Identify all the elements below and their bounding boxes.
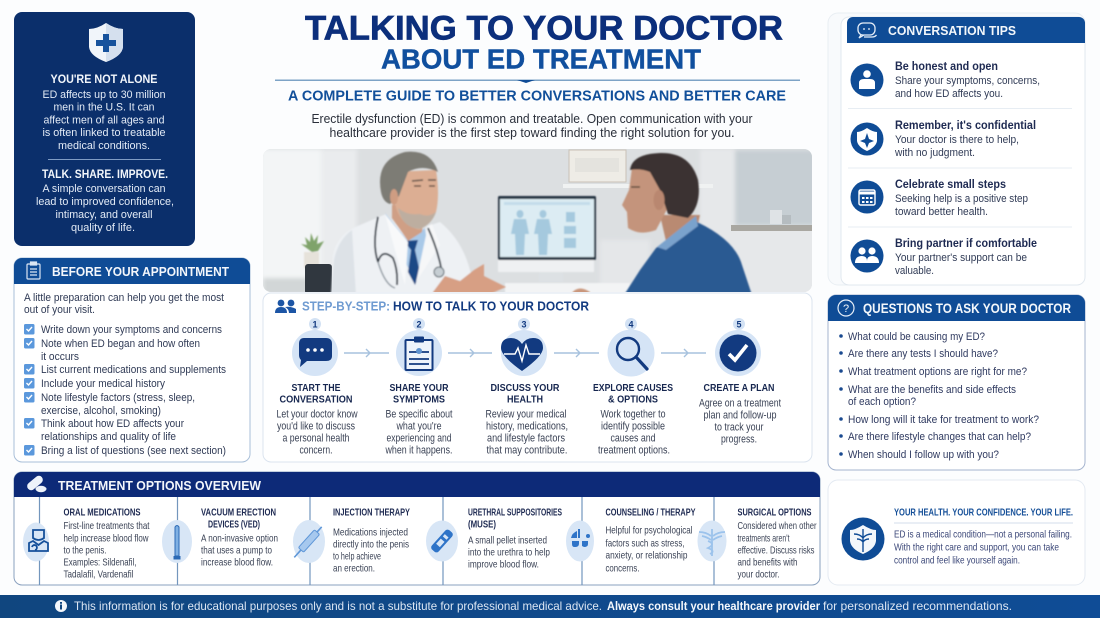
tip: bring partner: valuable. <box>895 265 934 277</box>
panel: questions to ask your doctor <box>828 295 1085 470</box>
step 2: share your symptoms <box>385 318 452 456</box>
heading: step-by-step <box>302 300 589 314</box>
heading: before your appointment: BEFORE YOUR APPOINTMENT <box>52 265 229 279</box>
plant <box>301 233 324 268</box>
heading: talk share improve: TALK. SHARE. IMPROVE. <box>42 169 168 181</box>
column: oral medications: help increase blood flow <box>64 534 149 544</box>
text: ED prevalence: is often linked to treatable <box>42 127 166 139</box>
title: ABOUT ED TREATMENT <box>381 44 701 74</box>
step 2: share your symptoms: when it happens. <box>385 444 452 456</box>
column: urethral suppositories: into the urethra to help <box>468 548 550 558</box>
text: medical condition <box>894 530 1072 566</box>
column: urethral suppositories: (MUSE) <box>468 520 496 530</box>
column: surgical options <box>698 508 817 580</box>
intro text: healthcare provider is the first step toward finding the right solution for you. <box>330 125 734 140</box>
step 4: explore causes: causes and <box>610 432 656 444</box>
step 5: create a plan: plan and follow-up <box>704 410 776 422</box>
step 2: share your symptoms: SYMPTOMS <box>393 394 445 406</box>
panel: your health callout <box>828 480 1085 585</box>
tip: be honest <box>850 61 1040 100</box>
column: oral medications <box>23 508 150 580</box>
tip: celebrate small steps <box>850 179 1028 218</box>
question list: What are the benefits and side effects <box>848 384 1016 396</box>
step 5: create a plan: 5 <box>736 320 742 330</box>
checklist: Think about how ED affects your <box>41 418 184 430</box>
step 5: create a plan: Agree on a treatment <box>699 398 781 410</box>
tip: celebrate small steps: Celebrate small steps <box>895 179 1006 191</box>
tip: be honest: Be honest and open <box>895 61 998 73</box>
step 4: explore causes <box>593 318 673 456</box>
panel: step-by-step <box>263 293 812 462</box>
column: injection therapy: Medications injected <box>333 528 408 538</box>
column: oral medications: Examples: Sildenafil, <box>64 558 136 568</box>
step 4: explore causes: Work together to <box>600 408 666 420</box>
checklist: Bring a list of questions (see next section) <box>41 445 226 457</box>
checklist: Note when ED began and how often <box>41 338 200 350</box>
text: simple conversation: quality of life. <box>71 222 135 234</box>
column: counseling therapy: COUNSELING / THERAPY <box>606 508 696 518</box>
text: ED prevalence <box>42 89 166 152</box>
question list: Are there lifestyle changes that can help? <box>848 431 1031 443</box>
question list: How long will it take for treatment to work? <box>848 414 1039 426</box>
text: intro <box>24 292 224 316</box>
tip: celebrate small steps: Seeking help is a positive step <box>895 193 1028 205</box>
column: oral medications: First-line treatments that <box>64 521 150 532</box>
step 1: start the conversation: concern. <box>300 444 332 456</box>
column: vacuum erection devices: VACUUM ERECTION <box>201 508 276 518</box>
column: counseling therapy: concerns. <box>606 564 640 574</box>
icon: people <box>275 300 296 313</box>
step 1: start the conversation <box>276 318 358 456</box>
tip: bring partner: Your partner's support can be <box>895 252 1027 264</box>
column: oral medications: ORAL MEDICATIONS <box>64 508 141 518</box>
tip: confidential: Remember, it's confidential <box>895 120 1036 132</box>
checklist <box>24 324 226 457</box>
icon: info <box>55 600 67 612</box>
text: intro: A little preparation can help you get the most <box>24 292 224 304</box>
step 5: create a plan <box>699 318 781 446</box>
heading: step-by-step: HOW TO TALK TO YOUR DOCTOR <box>393 300 589 314</box>
tip: confidential <box>850 120 1036 159</box>
column: surgical options: and benefits with <box>738 558 798 568</box>
footer: disclaimer: Always consult your healthcare provider <box>607 599 820 613</box>
text: simple conversation: lead to improved confidence, <box>36 196 174 208</box>
column: vacuum erection devices <box>162 508 278 568</box>
column: oral medications: Tadalafil, Vardenafil <box>64 570 134 580</box>
step 2: share your symptoms: what you're <box>396 420 442 432</box>
step 2: share your symptoms: Be specific about <box>386 408 452 420</box>
step 3: discuss your health: history, medications, <box>486 420 568 432</box>
heading: step-by-step: STEP-BY-STEP: <box>302 300 390 314</box>
doctor <box>331 152 506 295</box>
panel: you're not alone <box>14 12 195 246</box>
step 1: start the conversation: START THE <box>292 382 340 394</box>
heading: questions: QUESTIONS TO ASK YOUR DOCTOR <box>863 301 1071 316</box>
step 2: share your symptoms: 2 <box>416 320 422 330</box>
step 1: start the conversation: you'd like to discuss <box>277 420 355 432</box>
patient <box>571 153 752 295</box>
step 3: discuss your health <box>486 318 568 456</box>
arrows between steps <box>344 349 706 357</box>
text: simple conversation: intimacy, and overall <box>56 209 152 221</box>
checklist: Note lifestyle factors (stress, sleep, <box>41 392 195 404</box>
step 5: create a plan: to track your <box>714 422 764 434</box>
checklist: Include your medical history <box>41 378 165 390</box>
icon: pills <box>26 474 46 492</box>
step 3: discuss your health: 3 <box>521 320 527 330</box>
question list: What could be causing my ED? <box>848 331 985 343</box>
column: injection therapy: INJECTION THERAPY <box>333 508 410 518</box>
column: surgical options: treatments aren't <box>738 534 790 544</box>
step 1: start the conversation: Let your doctor know <box>276 408 358 420</box>
tip: bring partner <box>850 238 1037 277</box>
intro text: Erectile dysfunction (ED) is common and treatable. Open communication with your <box>312 111 753 126</box>
column: injection therapy: directly into the penis <box>333 540 409 550</box>
panel: treatment options overview <box>14 472 820 585</box>
text: ED prevalence: ED affects up to 30 million <box>42 89 166 101</box>
tip: be honest: and how ED affects you. <box>895 88 1003 100</box>
question list: of each option? <box>848 396 916 408</box>
step 4: explore causes: identify possible <box>601 420 665 432</box>
step 3: discuss your health: DISCUSS YOUR <box>490 382 560 394</box>
question list: When should I follow up with you? <box>848 449 999 461</box>
question list: Are there any tests I should have? <box>848 348 998 360</box>
column: counseling therapy: anxiety, or relationship <box>606 550 688 562</box>
step 2: share your symptoms: SHARE YOUR <box>390 382 449 394</box>
icon: caduceus shield <box>842 518 884 560</box>
question list: What treatment options are right for me? <box>848 366 1027 378</box>
column: injection therapy <box>292 508 410 574</box>
step 4: explore causes: treatment options. <box>598 444 670 456</box>
heading: treatment options: TREATMENT OPTIONS OVERVIEW <box>58 478 262 493</box>
footer: disclaimer: This information is for educational purposes only and is not a substitute for professional medical advice. <box>74 599 602 613</box>
computer monitor <box>498 196 596 282</box>
text: medical condition: With the right care and support, you can take <box>894 542 1059 554</box>
checklist: Write down your symptoms and concerns <box>41 324 222 336</box>
text: medical condition: control and feel like yourself again. <box>894 556 1020 566</box>
heading: conversation tips: CONVERSATION TIPS <box>888 24 1016 38</box>
text: intro: out of your visit. <box>24 304 95 316</box>
text: simple conversation: A simple conversation can <box>42 183 166 195</box>
tip: bring partner: Bring partner if comfortable <box>895 238 1037 250</box>
column: surgical options: your doctor. <box>738 570 780 580</box>
step 3: discuss your health: Review your medical <box>486 408 566 420</box>
step 4: explore causes: & OPTIONS <box>608 394 658 406</box>
question list <box>839 331 1039 461</box>
step 5: create a plan: progress. <box>721 434 757 446</box>
step 1: start the conversation: CONVERSATION <box>280 394 352 406</box>
column: surgical options: Considered when other <box>738 521 817 532</box>
icon: question mark: ? <box>843 303 849 315</box>
footer: disclaimer: for personalized recommendations. <box>823 599 1012 613</box>
column: surgical options: SURGICAL OPTIONS <box>738 508 812 518</box>
icon: speech bubbles <box>858 23 876 38</box>
text: ED prevalence: affect men of all ages and <box>44 114 164 126</box>
column: vacuum erection devices: DEVICES (VED) <box>208 520 260 530</box>
step 3: discuss your health: and lifestyle factors <box>487 432 566 444</box>
checklist: exercise, alcohol, smoking) <box>41 405 161 417</box>
column: counseling therapy <box>566 508 696 574</box>
icon: question mark <box>838 300 854 316</box>
column: urethral suppositories: A small pellet inserted <box>468 536 547 546</box>
title: TALKING TO YOUR DOCTOR <box>305 10 783 48</box>
column: vacuum erection devices: that uses a pump to <box>201 546 272 556</box>
footer: disclaimer <box>0 595 1100 618</box>
step 3: discuss your health: that may contribute. <box>486 444 568 456</box>
step 4: explore causes: EXPLORE CAUSES <box>593 382 673 394</box>
column: counseling therapy: factors such as stress, <box>606 538 684 550</box>
certificate and shelf <box>563 150 816 231</box>
text: ED prevalence: men in the U.S. It can <box>54 102 154 114</box>
step 1: start the conversation: 1 <box>312 320 318 330</box>
text: ED prevalence: medical conditions. <box>58 140 150 152</box>
text: simple conversation <box>36 183 174 234</box>
column: urethral suppositories: URETHRAL SUPPOSITORIES <box>468 508 562 518</box>
column: oral medications: to the penis. <box>64 546 106 556</box>
icon: shield with cross <box>89 23 123 62</box>
tip: be honest: Share your symptoms, concerns, <box>895 75 1040 87</box>
column: urethral suppositories <box>426 508 562 570</box>
subtitle: A COMPLETE GUIDE TO BETTER CONVERSATIONS AND BETTER CARE <box>288 88 786 104</box>
column: urethral suppositories: improve blood flow. <box>468 560 539 570</box>
tip: confidential: with no judgment. <box>894 147 975 159</box>
column: vacuum erection devices: A non-invasive option <box>201 534 278 544</box>
step 4: explore causes: 4 <box>628 320 634 330</box>
checklist: it occurs <box>41 351 79 363</box>
step 2: share your symptoms: experiencing and <box>386 432 452 444</box>
column: counseling therapy: Helpful for psychological <box>606 526 692 536</box>
step 1: start the conversation: a personal health <box>282 432 350 444</box>
column: vacuum erection devices: increase blood flow. <box>201 558 273 568</box>
panel: before your appointment <box>14 258 250 462</box>
checklist: List current medications and supplements <box>41 364 226 376</box>
tip: celebrate small steps: toward better health. <box>895 206 988 218</box>
photo: doctor and patient in consultation <box>260 149 816 295</box>
column: injection therapy: an erection. <box>333 564 375 574</box>
step 5: create a plan: CREATE A PLAN <box>704 382 774 394</box>
intro text <box>312 111 753 140</box>
step 3: discuss your health: HEALTH <box>507 394 543 406</box>
heading: you're not alone: YOU'RE NOT ALONE <box>50 74 158 86</box>
panel: conversation tips <box>828 13 1085 285</box>
title <box>305 10 783 74</box>
icon: clipboard <box>27 262 40 279</box>
column: injection therapy: to help achieve <box>333 552 381 562</box>
column: surgical options: effective. Discuss risks <box>738 546 814 556</box>
tip: confidential: Your doctor is there to help, <box>895 134 1019 146</box>
checklist: relationships and quality of life <box>41 431 176 443</box>
